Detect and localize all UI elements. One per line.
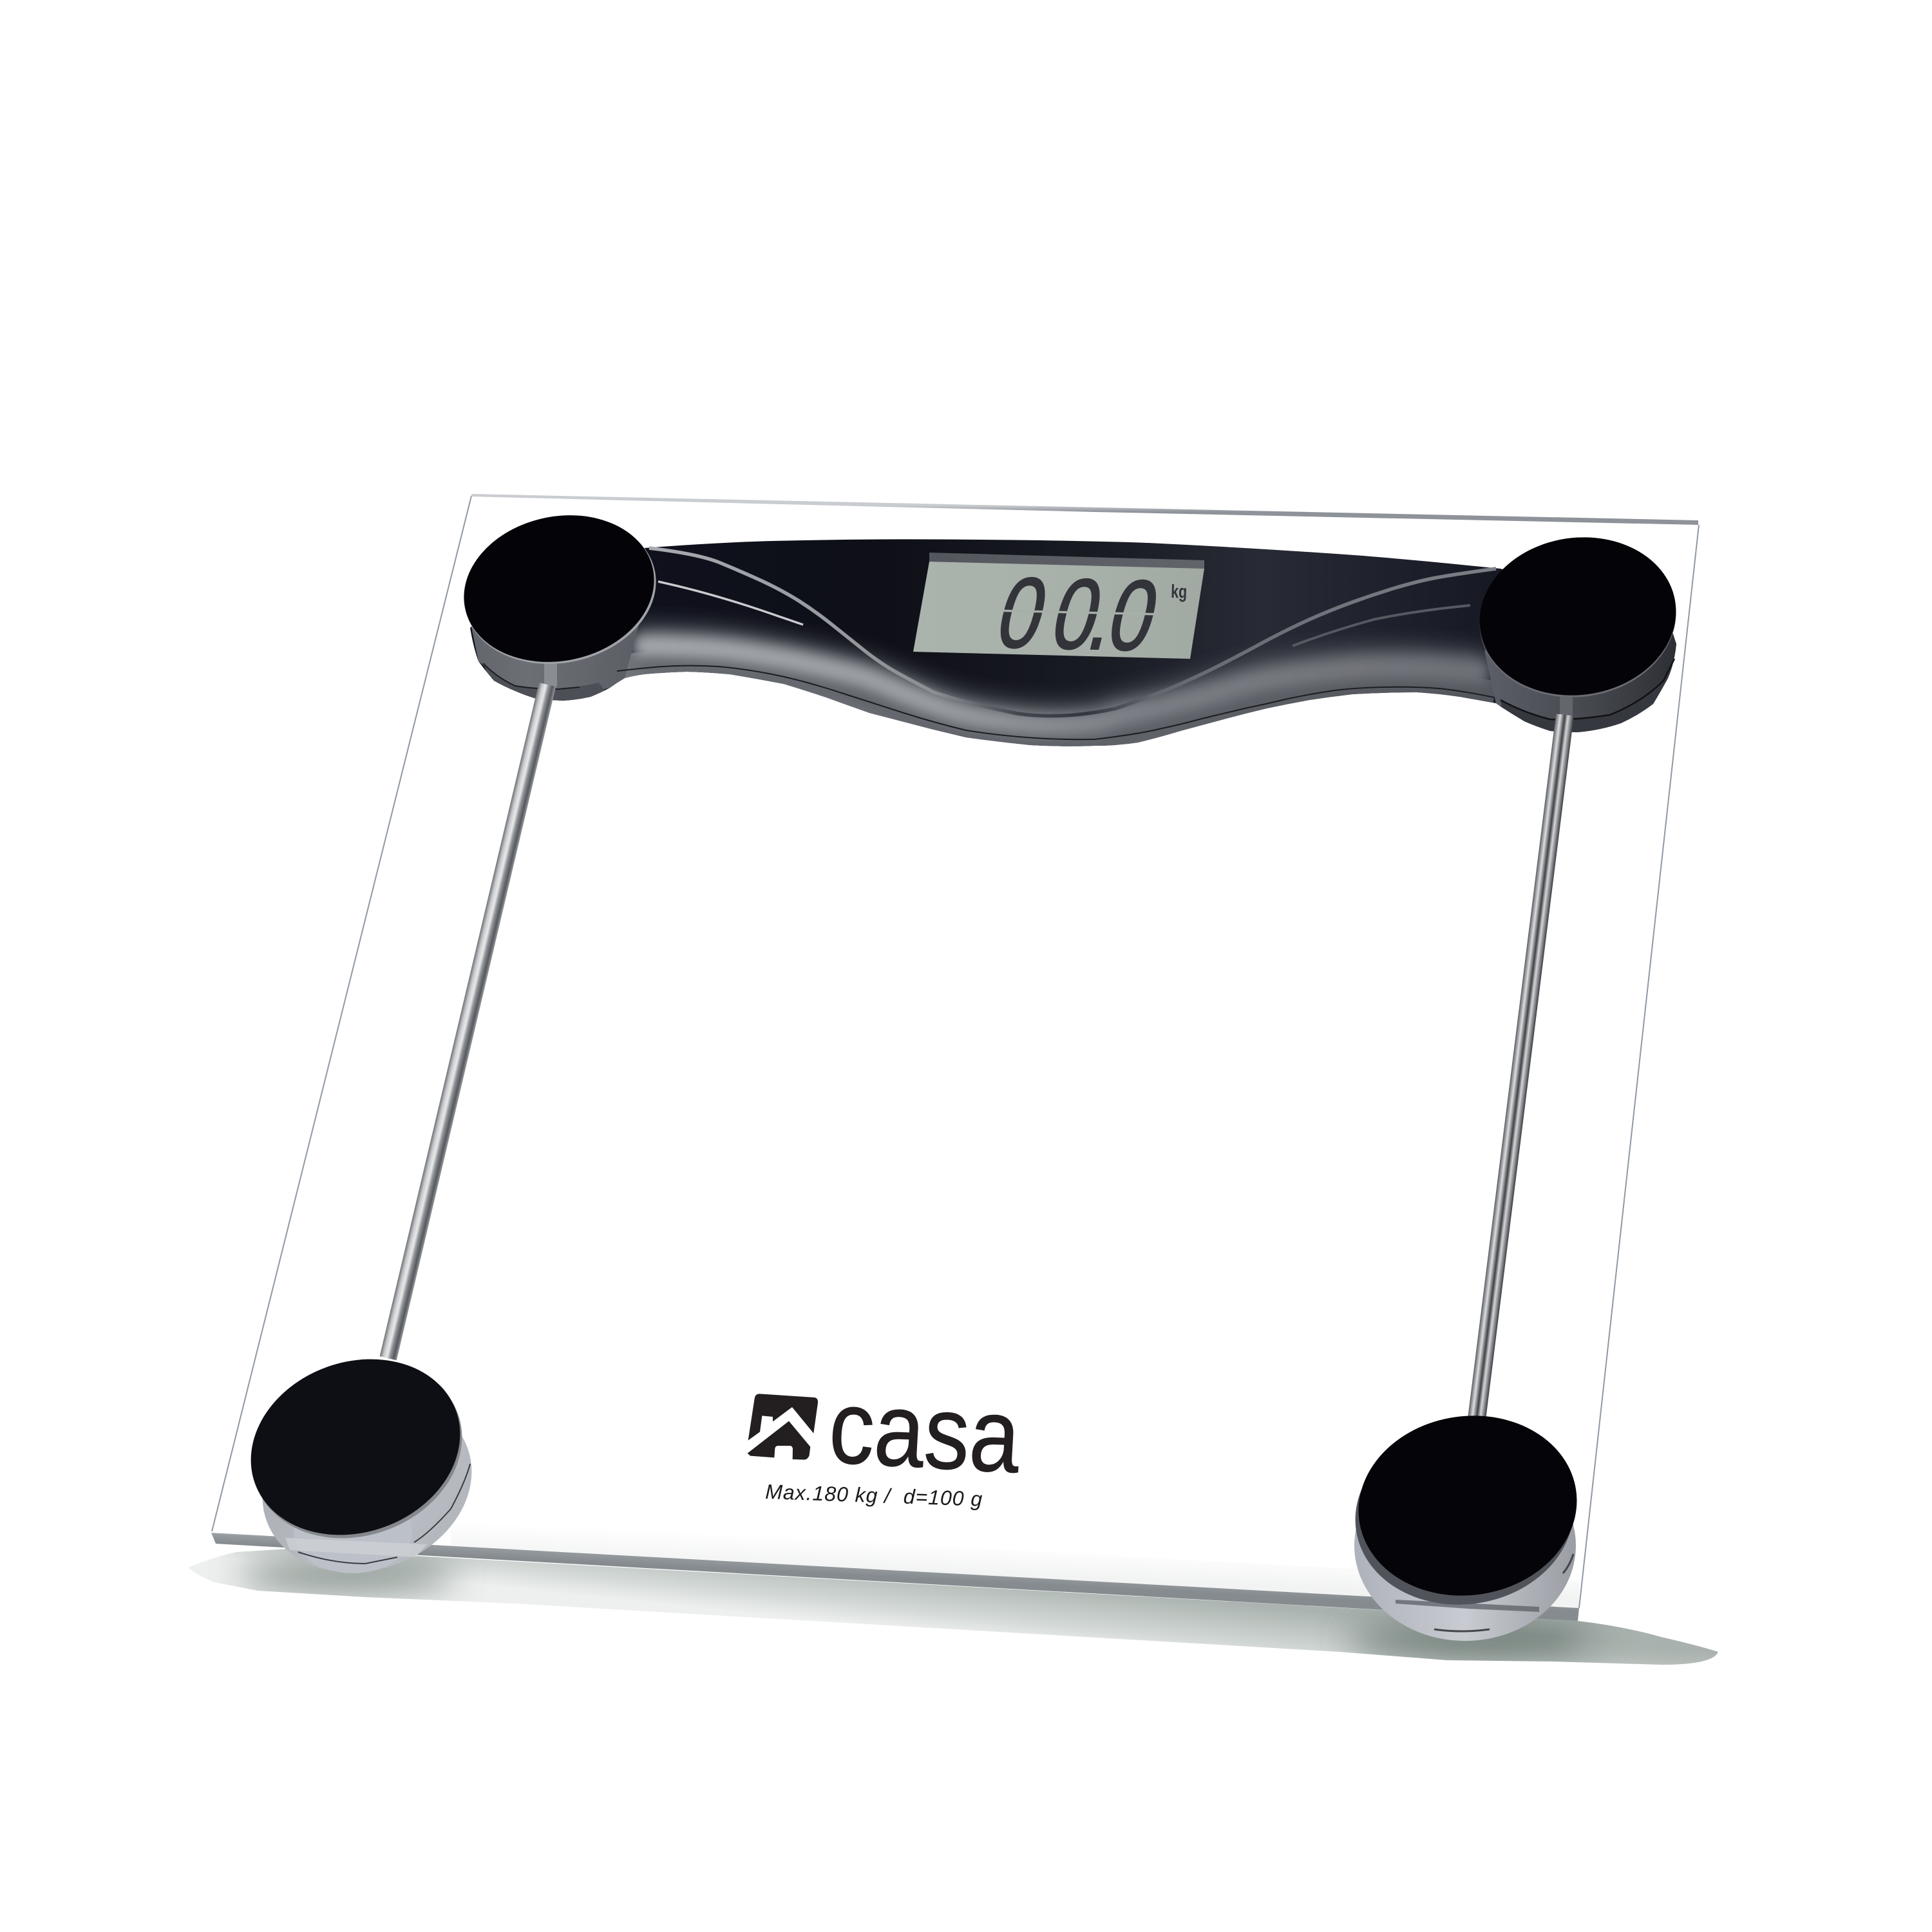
left cap side: [471, 625, 639, 689]
glass edge over foot: [1396, 1600, 1539, 1612]
glass plate: [212, 494, 1699, 1608]
brand wordmark: casa: [826, 1368, 1023, 1495]
glass top edge: [471, 494, 1698, 525]
bottom left foot: [226, 1331, 497, 1601]
glass right edge: [1579, 525, 1699, 1608]
LCD display: [913, 553, 1204, 671]
glass front edge: [211, 1533, 1579, 1621]
LCD screen: [913, 562, 1204, 659]
right steel rod: [1468, 694, 1574, 1419]
LCD reading: 00.0: [987, 556, 1170, 671]
housing seam line: [617, 666, 1494, 739]
right cap side: [1484, 633, 1676, 719]
right cap seam: [1501, 659, 1674, 719]
glass left edge: [212, 496, 471, 1531]
top left foot pad: [450, 498, 670, 681]
foot rim: [1343, 1411, 1586, 1618]
wave crease: [649, 548, 1496, 716]
bottom right foot: [1343, 1402, 1589, 1641]
casa logo: [748, 1368, 1023, 1495]
right cap lower rim: [1501, 663, 1673, 732]
display housing bar: [467, 539, 1681, 746]
left cap seam: [483, 663, 580, 689]
capacity specification: Max.180 kg / d=100 g: [765, 1480, 983, 1511]
foot seam: [1434, 1554, 1573, 1631]
left steel rod: [380, 663, 557, 1360]
foot seam: [298, 1464, 470, 1564]
glass edge over foot: [285, 1538, 427, 1557]
foot body: [238, 1368, 497, 1601]
foot pad: [1347, 1402, 1589, 1609]
foot body: [1354, 1450, 1576, 1641]
floor shadow under scale: [188, 1549, 1718, 1665]
LCD unit: kg: [1171, 582, 1188, 603]
LCD top bezel: [929, 553, 1204, 569]
top right foot pad: [1470, 525, 1686, 710]
left cap lower rim: [484, 665, 605, 701]
left swoosh highlight: [658, 582, 803, 625]
foot rim: [228, 1334, 487, 1567]
right swoosh highlight: [1293, 605, 1470, 646]
house icon: [748, 1394, 818, 1460]
foot pad: [226, 1331, 485, 1564]
